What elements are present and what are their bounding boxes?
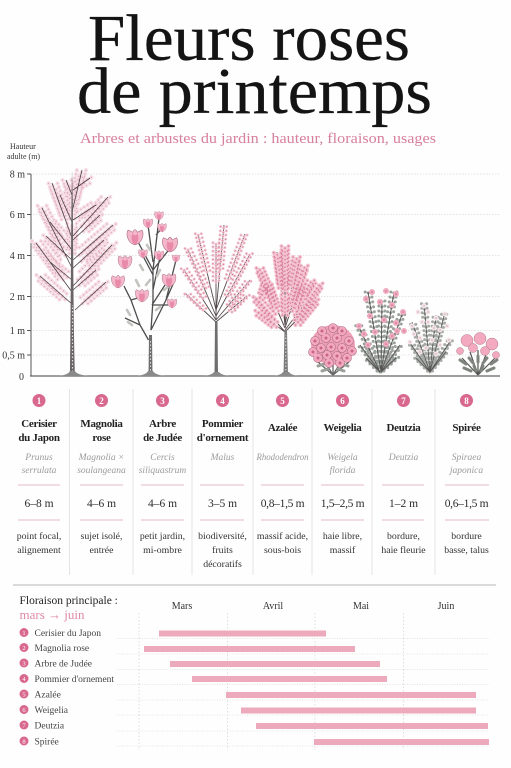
row: arbre de Judée (20, 658, 380, 670)
row: magnolia rose: Magnolia rose (34, 644, 89, 654)
tree: magnolia rose (111, 211, 180, 376)
calendar heading: mars → juin (20, 607, 85, 622)
column: cerisier du Japon: Cerisier (21, 418, 57, 430)
title (77, 2, 432, 128)
month labels: Mars (172, 601, 192, 612)
row: weigelia: Weigelia (34, 706, 69, 716)
column: magnolia rose: rose (92, 432, 111, 444)
column: arbre de Judée: 4–6 m (148, 498, 177, 510)
row: pommier d'ornement (20, 674, 387, 685)
column: magnolia rose: Magnolia × (78, 453, 124, 463)
column: weigelia: massif (330, 545, 356, 556)
row: deutzia (20, 720, 488, 732)
title: Fleurs roses (88, 2, 410, 75)
column: spirée: bordure (451, 531, 482, 542)
column: deutzia: Deutzia (388, 453, 419, 463)
column: azalée: Azalée (268, 422, 298, 434)
column: spirée: Spiraea (452, 453, 482, 463)
column: spirée: japonica (448, 466, 483, 476)
row: arbre de Judée: Arbre de Judée (34, 660, 92, 670)
column: cerisier du Japon: point focal, (17, 531, 61, 542)
column: arbre de Judée: siliquastrum (139, 466, 186, 476)
column: weigelia: Weigela (327, 453, 358, 463)
row: azalée (20, 690, 476, 700)
column: azalée: 0,8–1,5 m (261, 498, 305, 510)
column: arbre de Judée: 3 (160, 396, 165, 406)
column: weigelia: haie libre, (323, 531, 362, 542)
axis title: Hauteur (10, 142, 36, 151)
column: pommier d'ornement: décoratifs (203, 559, 242, 570)
column: cerisier du Japon: serrulata (22, 466, 57, 476)
column: magnolia rose (77, 394, 126, 556)
column: azalée: massif acide, (257, 531, 308, 542)
column: azalée: 5 (280, 396, 285, 406)
axis title: adulte (m) (7, 152, 40, 161)
row: arbre de Judée: 3 (22, 660, 26, 668)
month labels (172, 601, 454, 612)
column: arbre de Judée: mi-ombre (143, 545, 182, 556)
column: cerisier du Japon: 1 (37, 396, 42, 406)
row: pommier d'ornement: 4 (22, 676, 26, 683)
subtitle: Arbres et arbustes du jardin : hauteur, floraison, usages (80, 131, 436, 147)
column: pommier d'ornement: d'ornement (197, 432, 249, 444)
column: weigelia (321, 394, 365, 556)
column: spirée: 8 (464, 396, 469, 406)
calendar heading: Floraison principale : (20, 595, 118, 607)
column: spirée: basse, talus (444, 545, 489, 556)
column: arbre de Judée: Cercis (150, 453, 175, 463)
column: deutzia: haie fleurie (381, 545, 426, 556)
shrub: deutzia (407, 303, 454, 372)
column: cerisier du Japon: du Japon (18, 432, 60, 444)
calendar heading (20, 595, 118, 622)
column: deutzia: 1–2 m (389, 498, 418, 510)
month labels: Avril (263, 601, 283, 612)
row: deutzia: 7 (22, 722, 26, 730)
column: magnolia rose: Magnolia (80, 418, 123, 430)
row: azalée: 5 (22, 692, 26, 698)
column: pommier d'ornement: 4 (220, 396, 225, 406)
row: magnolia rose (20, 643, 355, 654)
column: magnolia rose: 2 (99, 396, 104, 406)
flowering calendar (20, 595, 490, 750)
column: weigelia: 1,5–2,5 m (321, 498, 365, 510)
column: arbre de Judée: Arbre (149, 418, 176, 430)
column: pommier d'ornement: 3–5 m (208, 498, 237, 510)
y axis: 2 m (10, 292, 25, 303)
column: weigelia: florida (330, 465, 356, 476)
column: arbre de Judée: de Judée (143, 432, 182, 444)
column: cerisier du Japon (17, 394, 61, 556)
column: deutzia: 7 (401, 396, 406, 406)
row: weigelia: 6 (22, 707, 26, 714)
column: pommier d'ornement: Pommier (202, 418, 244, 430)
column: deutzia: Deutzia (387, 422, 421, 434)
tree: cerisier du Japon (32, 168, 118, 376)
title: de printemps (77, 55, 432, 128)
column: arbre de Judée: petit jardin, (140, 531, 185, 542)
column: azalée: Rhododendron (256, 453, 309, 463)
column: weigelia: Weigelia (324, 422, 362, 434)
y axis (2, 170, 500, 383)
row: deutzia: Deutzia (34, 722, 65, 732)
y axis: 8 m (10, 170, 25, 180)
row: azalée: Azalée (34, 690, 61, 700)
month labels: Mai (353, 601, 369, 612)
column: cerisier du Japon: alignement (17, 545, 61, 556)
y axis: 0,5 m (2, 350, 25, 362)
row: pommier d'ornement: Pommier d'ornement (34, 675, 114, 685)
column: cerisier du Japon: 6–8 m (24, 498, 54, 510)
column: spirée (444, 394, 489, 556)
column: magnolia rose: soulangeana (77, 466, 126, 476)
tree: pommier d'ornement (252, 246, 324, 376)
month labels: Juin (438, 601, 454, 612)
row: cerisier du Japon (20, 628, 326, 639)
comparison table (17, 389, 489, 575)
shrub: spirée (456, 332, 500, 375)
row: spirée: Spirée (34, 738, 59, 748)
row: weigelia (20, 705, 476, 716)
column: deutzia: bordure, (387, 531, 420, 542)
row: cerisier du Japon: Cerisier du Japon (34, 629, 101, 639)
column: magnolia rose: entrée (90, 545, 114, 556)
y axis: 6 m (10, 210, 25, 221)
column: azalée: sous-bois (264, 545, 301, 556)
shrub: weigelia (355, 291, 406, 372)
column: magnolia rose: sujet isolé, (81, 531, 122, 542)
column: magnolia rose: 4–6 m (87, 498, 116, 510)
y axis: 0 (19, 372, 24, 383)
column: weigelia: 6 (340, 396, 345, 406)
row: spirée (20, 736, 489, 748)
tree: arbre de Judée (181, 224, 253, 376)
height chart (2, 142, 500, 383)
column: pommier d'ornement: Malus (210, 453, 235, 463)
row: cerisier du Japon: 1 (22, 630, 26, 637)
y axis: 4 m (10, 251, 25, 262)
shrub: azalée (311, 325, 355, 375)
column: pommier d'ornement (197, 394, 249, 570)
row: magnolia rose: 2 (22, 645, 26, 652)
column: azalée (256, 394, 309, 556)
column: spirée: 0,6–1,5 m (445, 498, 489, 510)
column: cerisier du Japon: Prunus (24, 453, 53, 463)
column: arbre de Judée (139, 394, 186, 556)
column: pommier d'ornement: biodiversité, (198, 531, 247, 542)
column: deutzia (381, 394, 426, 556)
column: pommier d'ornement: fruits (212, 545, 233, 556)
y axis: 1 m (10, 326, 25, 337)
row: spirée: 8 (22, 738, 26, 746)
column: spirée: Spirée (452, 422, 481, 434)
